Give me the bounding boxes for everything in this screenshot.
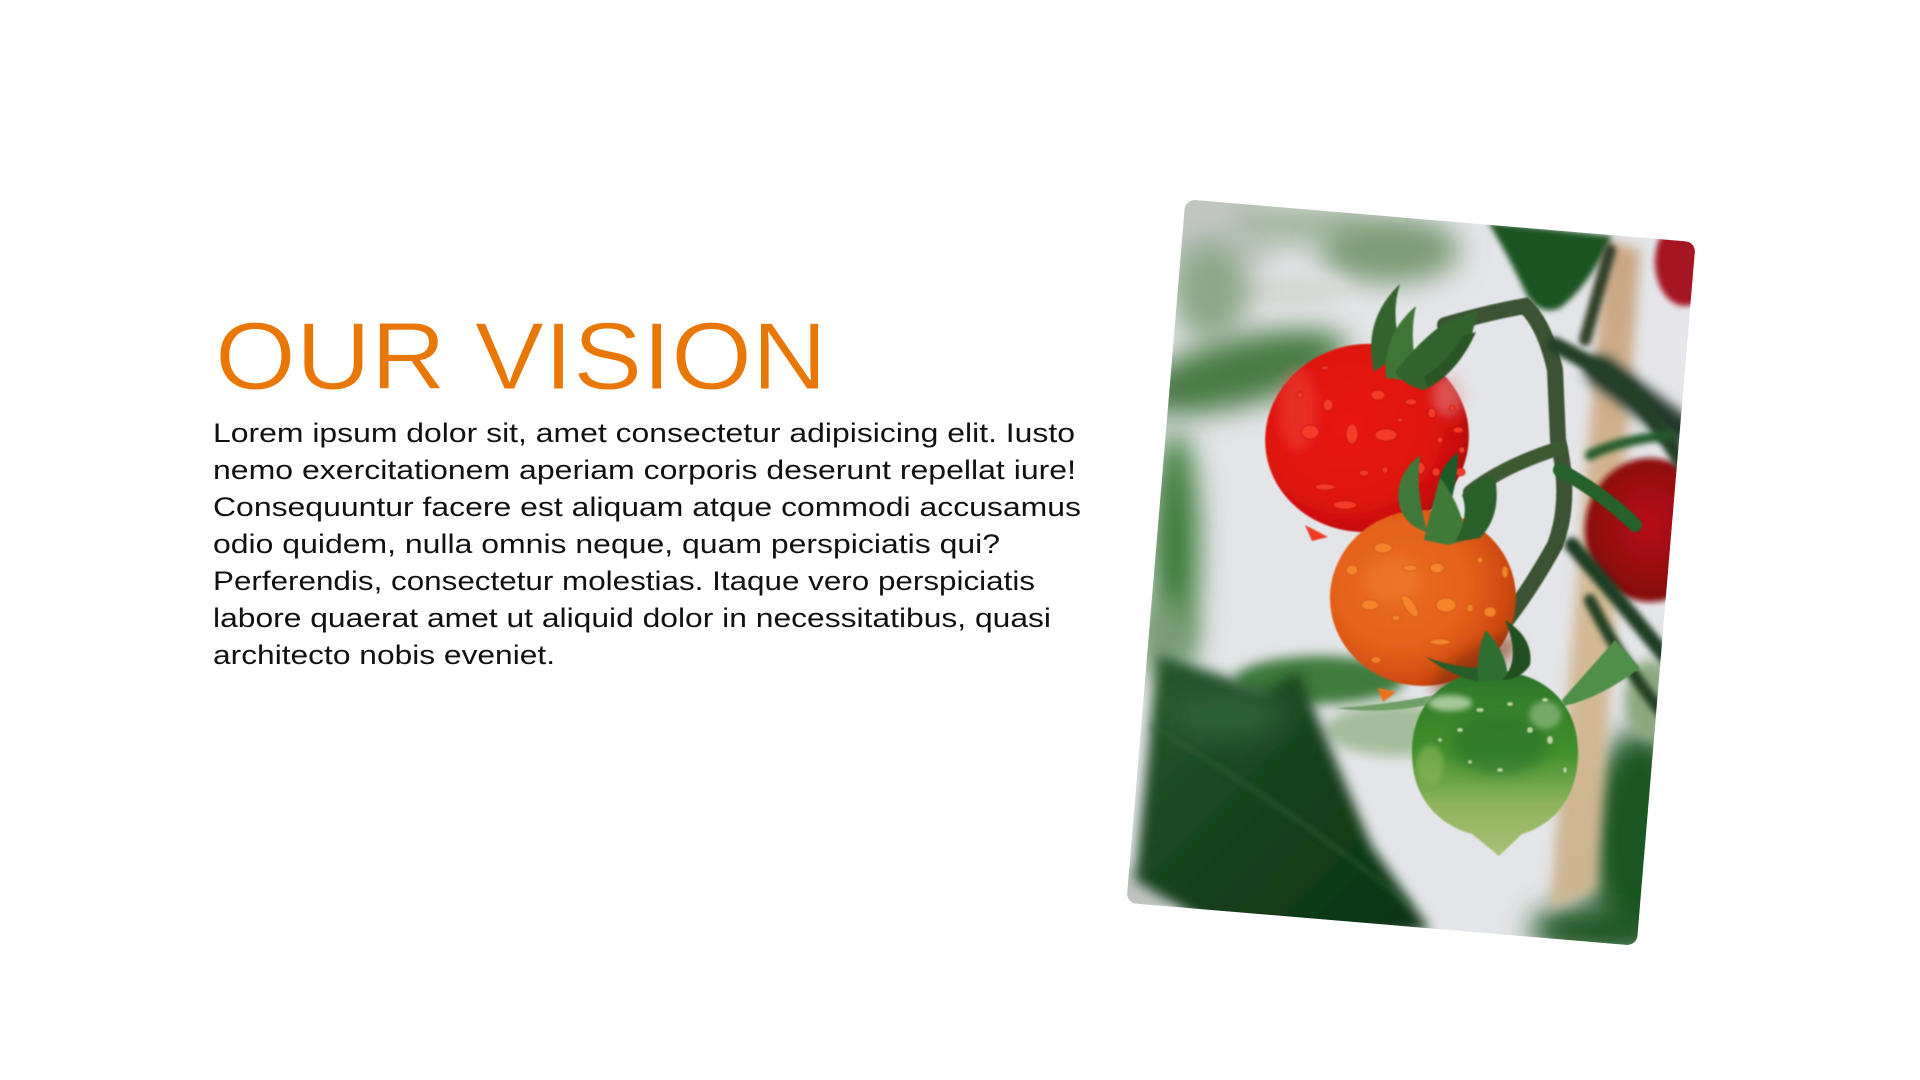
vine stems bbox=[1445, 250, 1680, 710]
body text block: Perferendis, consectetur molestias. Itaque vero perspiciatis bbox=[213, 566, 1035, 596]
top leaf bbox=[1488, 222, 1612, 310]
water droplets: green tomato bbox=[1438, 698, 1567, 773]
calyx: orange tomato bbox=[1398, 452, 1497, 545]
orange tomato bbox=[1330, 510, 1526, 704]
body text block: odio quidem, nulla omnis neque, quam perspiciatis qui? bbox=[213, 529, 1000, 559]
calyx: red tomato bbox=[1371, 284, 1478, 390]
green tomato bbox=[1412, 671, 1578, 856]
bottom left grey corner bbox=[1127, 863, 1172, 906]
background tomato: right bbox=[1580, 453, 1678, 607]
right blurred foliage bbox=[1625, 660, 1675, 740]
small side leaf bbox=[1562, 640, 1640, 706]
body text block: architecto nobis eveniet. bbox=[213, 640, 555, 670]
body text block: nemo exercitationem aperiam corporis deserunt repellat iure! bbox=[213, 455, 1076, 485]
water droplets: orange tomato bbox=[1346, 543, 1508, 663]
background tomato: top right bbox=[1650, 238, 1695, 310]
body text block: Consequuntur facere est aliquam atque commodi accusamus bbox=[213, 492, 1081, 522]
water droplets: red tomato bbox=[1297, 366, 1465, 509]
wooden stake bbox=[1550, 240, 1640, 910]
blurred background foliage bbox=[1125, 170, 1695, 956]
photo: tomatoes on the vine bbox=[1127, 200, 1695, 945]
red tomato bbox=[1264, 342, 1470, 542]
right background: pale wall bbox=[1640, 270, 1700, 430]
thin leaf behind green tomato bbox=[1336, 694, 1434, 712]
bottom left leaf bbox=[1135, 655, 1430, 950]
body text block: Lorem ipsum dolor sit, amet consectetur adipisicing elit. Iusto bbox=[213, 418, 1075, 448]
title: OUR VISION bbox=[215, 303, 827, 410]
body text block bbox=[213, 418, 1081, 670]
body text block: labore quaerat amet ut aliquid dolor in necessitatibus, quasi bbox=[213, 603, 1051, 633]
calyx: green tomato bbox=[1426, 620, 1530, 682]
